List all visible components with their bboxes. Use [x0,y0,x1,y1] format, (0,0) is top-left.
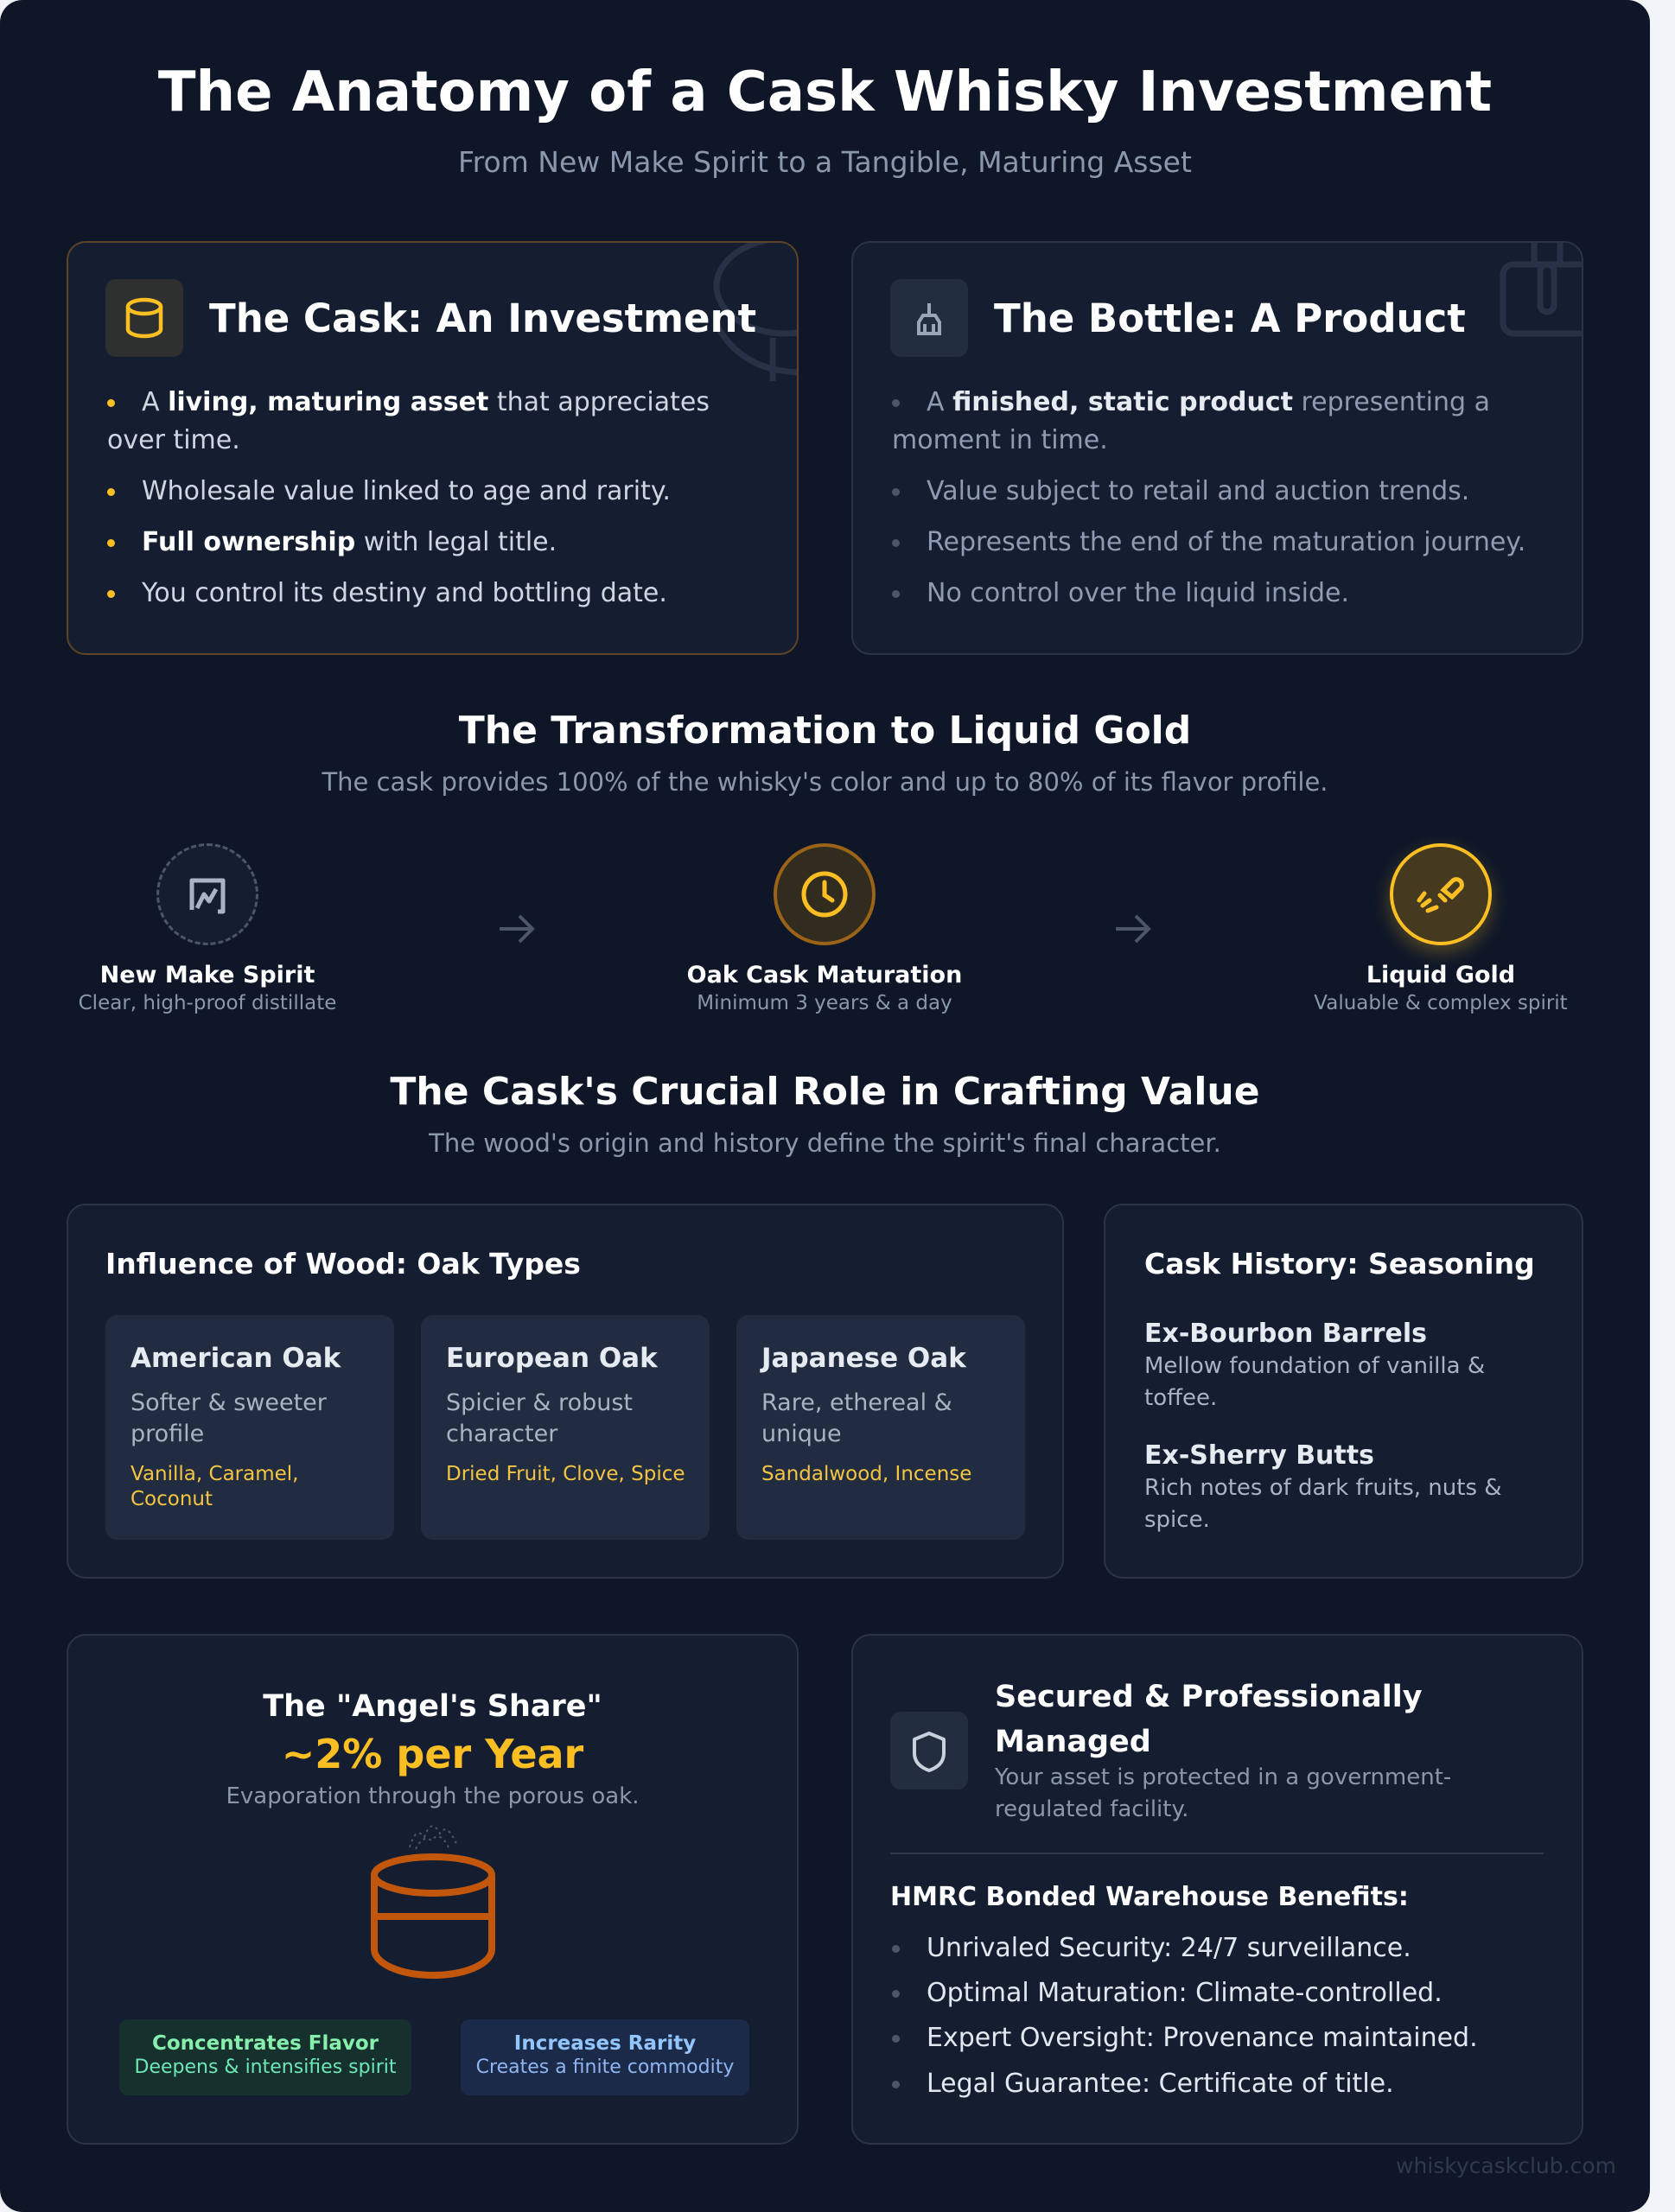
bullet: finished [892,387,1490,455]
bullet: ownership: Full ownership with legal title. [142,527,557,557]
bullet: living asset: A living, maturing asset that appreciates [142,387,710,417]
card: european oak: Spicier & robust character [446,1389,633,1447]
step: oak cask maturation [687,843,962,1014]
step: new make spirit: New Make Spirit [100,962,315,988]
item: ex-bourbon: Mellow foundation of vanilla & toffee. [1144,1353,1485,1411]
icon: clock [774,843,876,945]
icon: decorative bottle [1500,243,1582,337]
step: new make spirit: Clear, high-proof distillate [79,992,336,1014]
card: japanese oak: Rare, ethereal & unique [761,1389,952,1447]
bullet: finished: A finished, static product representing a [927,387,1490,417]
card: japanese oak [736,1315,1025,1540]
subheading: cask role: The wood's origin and history define the spirit's final character. [429,1128,1221,1158]
panel: secured [851,1634,1583,2145]
item: ex-bourbon: Ex-Bourbon Barrels [1144,1319,1427,1349]
list: benefits: Optimal Maturation: Climate-controlled. [927,1978,1443,2008]
item: ex-sherry: Ex-Sherry Butts [1144,1440,1374,1471]
list: benefits [892,1933,1478,2099]
heading: hmrc: HMRC Bonded Warehouse Benefits: [890,1882,1409,1912]
divider [890,1853,1544,1854]
bullet: living asset [107,387,710,455]
subtitle: From New Make Spirit to a Tangible, Maturing Asset [458,145,1192,179]
item: ex-bourbon [1144,1319,1485,1411]
arrow 2 [1116,914,1151,944]
bullet: control: You control its destiny and bottling date. [142,578,667,608]
icon: distillate [156,843,258,945]
item: ex-sherry: Rich notes of dark fruits, nuts & spice. [1144,1475,1502,1533]
bullet list [107,387,710,608]
bullet list [892,387,1525,608]
icon: evaporating cask [371,1825,495,1979]
step: liquid gold: Liquid Gold [1366,962,1515,988]
icon: shield [890,1712,968,1789]
footer: source: whiskycaskclub.com [1396,2153,1616,2178]
heading: The Bottle: A Product [994,296,1466,341]
card: japanese oak: Sandalwood, Incense [761,1463,971,1485]
badge: increases rarity: Creates a finite commodity [476,2056,734,2078]
panel: angel's share [67,1634,799,2145]
title: The Anatomy of a Cask Whisky Investment [158,60,1492,124]
caption: Evaporation through the porous oak. [226,1783,640,1809]
badge: increases rarity [461,2019,749,2095]
heading: The Cask: An Investment [209,296,756,341]
heading: cask role: The Cask's Crucial Role in Crafting Value [390,1070,1260,1114]
badge: concentrates flavor [119,2019,411,2095]
card: european oak: Dried Fruit, Clove, Spice [446,1463,685,1485]
subheading: transformation: The cask provides 100% of the whisky's color and up to 80% of its flavor profile. [322,767,1328,797]
icon: bottle [890,279,968,357]
step: oak cask maturation: Minimum 3 years & a day [697,992,952,1014]
bullet: wholesale: Wholesale value linked to age and rarity. [142,476,671,506]
list: benefits: Expert Oversight: Provenance maintained. [927,2023,1478,2053]
heading: angel's share: The "Angel's Share" [263,1689,602,1724]
card: japanese oak: Japanese Oak [761,1343,966,1374]
step: liquid gold [1314,841,1568,1014]
heading: transformation: The Transformation to Liquid Gold [459,709,1191,753]
badge: concentrates flavor: Concentrates Flavor [152,2032,379,2055]
stat: 2% per year: ~2% per Year [282,1731,583,1777]
heading: seasoning: Cask History: Seasoning [1144,1247,1535,1281]
card: european oak [421,1315,710,1540]
panel: bottle product [851,241,1583,655]
bullet: living asset: over time. [107,425,240,455]
card: european oak: European Oak [446,1343,658,1374]
step: new make spirit [79,843,336,1014]
bullet: end: Represents the end of the maturation journey. [927,527,1525,557]
badge: concentrates flavor: Deepens & intensifies spirit [135,2056,396,2078]
icon: gold [1390,843,1492,945]
icon: cask [105,279,183,357]
bullet: value: Value subject to retail and auction trends. [927,476,1469,506]
card: american oak: Softer & sweeter profile [131,1389,327,1447]
icon: decorative cask [714,243,797,381]
step: oak cask maturation: Oak Cask Maturation [687,962,962,988]
card: american oak [105,1315,394,1540]
list: benefits: Legal Guarantee: Certificate of title. [927,2069,1394,2099]
heading: oak types: Influence of Wood: Oak Types [105,1247,581,1281]
step: liquid gold: Valuable & complex spirit [1314,992,1568,1014]
text: protected: Your asset is protected in a government-regulated facility. [995,1764,1451,1822]
panel: oak types [67,1204,1064,1579]
card: american oak: American Oak [131,1343,341,1374]
list: benefits: Unrivaled Security: 24/7 surveillance. [927,1933,1411,1963]
card: american oak: Vanilla, Caramel, Coconut [131,1463,298,1510]
panel: cask investment [67,241,799,655]
item: ex-sherry [1144,1440,1502,1533]
arrow 1 [500,914,535,944]
badge: increases rarity: Increases Rarity [514,2032,696,2055]
panel: cask history [1104,1204,1583,1579]
heading: secured: Secured & Professionally Managed [995,1680,1423,1759]
bullet: no control: No control over the liquid inside. [927,578,1349,608]
bullet: finished: moment in time. [892,425,1108,455]
